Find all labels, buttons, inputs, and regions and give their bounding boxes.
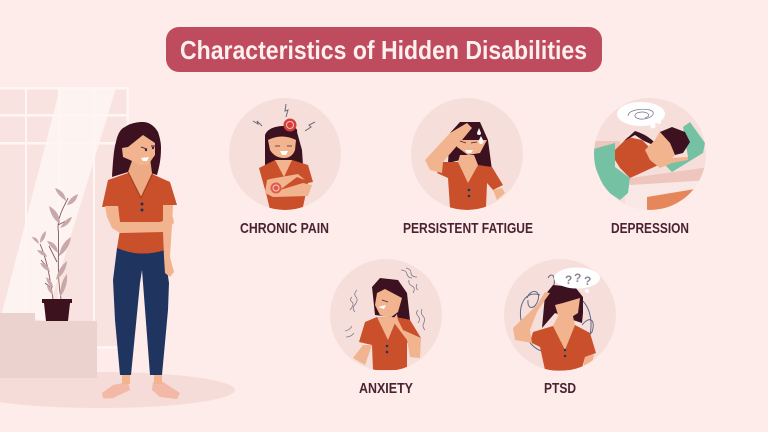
facial features (141, 146, 156, 149)
label: chronic pain: CHRONIC PAIN (240, 220, 329, 237)
main woman figure (102, 122, 180, 399)
ankles (122, 372, 130, 384)
floor shadow (0, 372, 235, 408)
pants (113, 248, 169, 375)
ledge (0, 313, 97, 378)
title (166, 27, 602, 72)
panel: depression (594, 98, 706, 210)
shoes (102, 382, 130, 398)
panel: ptsd (504, 259, 616, 371)
panel: ptsd: ? (584, 274, 591, 288)
potted plant (32, 188, 78, 321)
panel: ptsd: ? (565, 273, 572, 287)
panel: ptsd: ? (574, 271, 581, 285)
neck and v (128, 158, 152, 197)
window with curtain (0, 87, 129, 378)
label: ptsd: PTSD (544, 380, 576, 397)
label: persistent fatigue: PERSISTENT FATIGUE (403, 220, 533, 237)
panel: chronic pain (229, 98, 341, 211)
label: depression: DEPRESSION (611, 220, 689, 237)
shirt (102, 173, 177, 254)
panel: anxiety (330, 259, 442, 371)
hair (112, 122, 161, 177)
buttons (140, 202, 144, 206)
arms (163, 205, 174, 277)
title: Characteristics of Hidden Disabilities (180, 35, 587, 65)
face (122, 135, 155, 165)
label: anxiety: ANXIETY (359, 380, 413, 397)
panel: persistent fatigue (411, 98, 523, 210)
